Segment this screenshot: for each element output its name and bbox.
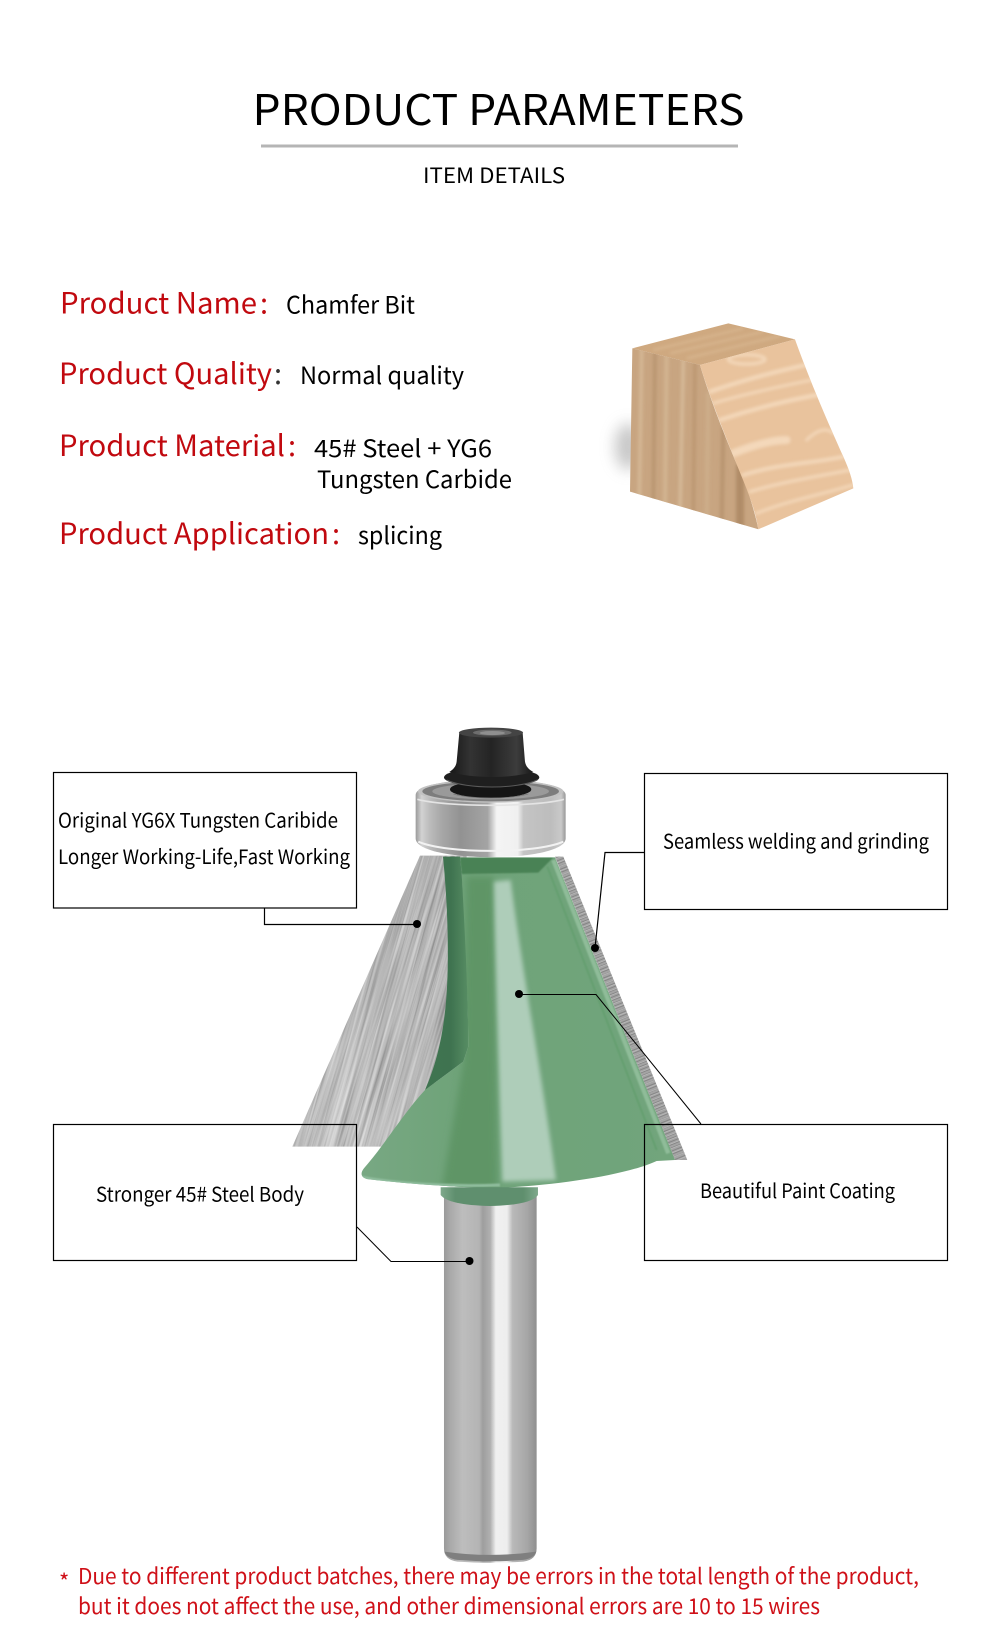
- title: PRODUCT PARAMETERS: [252, 77, 744, 138]
- product material row: Product Material: [59, 423, 285, 465]
- product material row: [59, 423, 512, 495]
- subtitle: ITEM DETAILS: [423, 160, 565, 190]
- connector: paint: [515, 990, 701, 1124]
- connector: carbide: [264, 908, 421, 928]
- product name row: :: [260, 280, 268, 322]
- footnote: but it does not affect the use, and other dimensional errors are 10 to 15 wires: [78, 1589, 820, 1621]
- bit: black cap and washer: [444, 728, 539, 798]
- callout box: welding: Seamless welding and grinding: [663, 826, 929, 854]
- callout box: carbide: [54, 772, 356, 908]
- connector: welding: [591, 852, 644, 952]
- bit: carbide cutter left: [292, 856, 467, 1147]
- connector: steel body: [357, 1227, 474, 1265]
- product material row: 45# Steel + YG6: [314, 429, 492, 464]
- product name row: [60, 280, 415, 322]
- footnote: [59, 1559, 919, 1621]
- product quality row: [59, 351, 464, 393]
- product application row: Product Application: [59, 511, 329, 553]
- product quality row: :: [274, 351, 282, 393]
- wood block illustration: [615, 323, 853, 529]
- panel: product details: [59, 280, 512, 553]
- product application row: splicing: [358, 516, 442, 551]
- bit: carbide cutter right: [555, 857, 687, 1160]
- heading rule: [261, 144, 738, 148]
- product material row: Tungsten Carbide: [317, 460, 512, 495]
- product material row: :: [288, 423, 296, 465]
- callout box: steel body: [54, 1124, 356, 1260]
- product quality row: Normal quality: [300, 356, 464, 391]
- bit: green steel body: [358, 857, 675, 1190]
- callout box: steel body: Stronger 45# Steel Body: [96, 1178, 305, 1208]
- callout box: welding: [644, 774, 948, 910]
- product quality row: Product Quality: [59, 351, 272, 393]
- bit: shank: [444, 1193, 537, 1563]
- bit: bearing: [416, 779, 566, 857]
- bit: shank collar: [441, 1187, 538, 1206]
- product name row: Chamfer Bit: [286, 286, 415, 320]
- router bit illustration: [292, 728, 700, 1563]
- footnote: *: [59, 1565, 69, 1597]
- callout box: carbide: Original YG6X Tungsten Caribide: [58, 804, 338, 834]
- callout box: carbide: Longer Working-Life,Fast Working: [58, 841, 350, 870]
- product name row: Product Name: [60, 280, 257, 322]
- product application row: :: [332, 511, 340, 553]
- footnote: Due to different product batches, there may be errors in the total length of the product,: [78, 1559, 919, 1591]
- bit: dark green flute: [425, 857, 468, 1090]
- callout box: paint: [644, 1124, 948, 1260]
- callout box: paint: Beautiful Paint Coating: [700, 1175, 895, 1204]
